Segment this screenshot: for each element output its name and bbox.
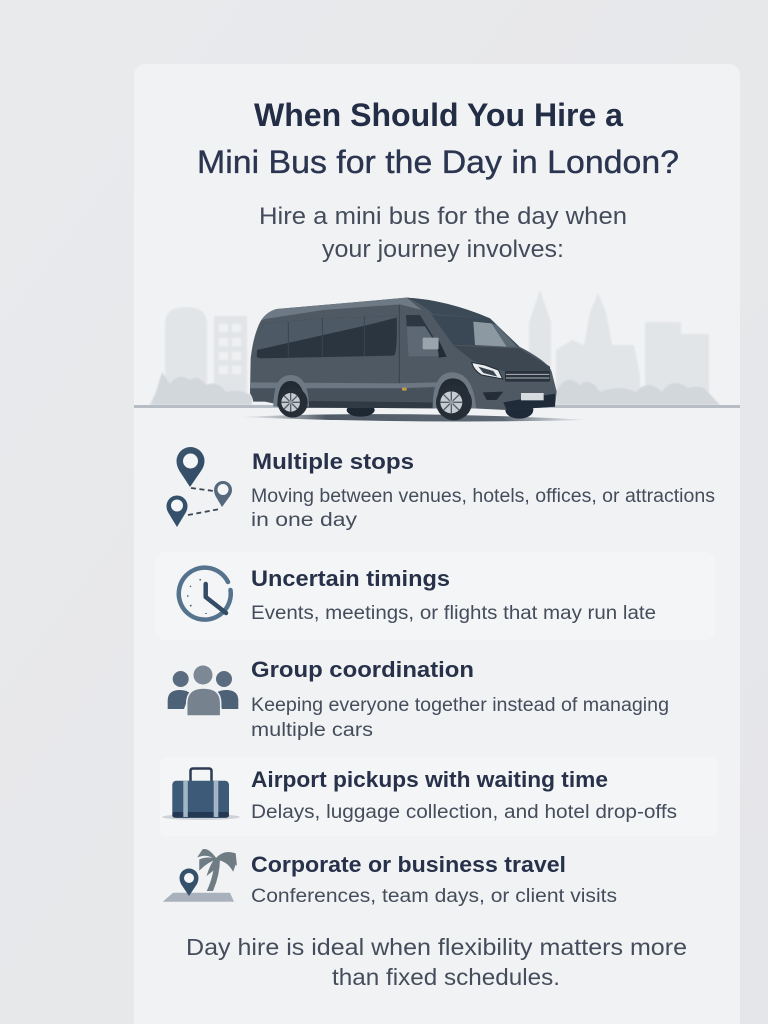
closing statement: Day hire is ideal when flexibility matters more — [186, 934, 687, 960]
heading: Corporate or business travel — [251, 852, 566, 877]
title — [197, 97, 679, 180]
description: Delays, luggage collection, and hotel drop-offs — [251, 802, 677, 823]
description: Keeping everyone together instead of managing — [251, 695, 669, 716]
ground line — [134, 405, 740, 408]
illustration: mini bus — [237, 298, 592, 421]
item: multiple stops — [166, 447, 715, 531]
heading: Multiple stops — [252, 449, 414, 474]
panel: main card — [134, 64, 740, 1024]
icon: map pins — [166, 447, 232, 527]
heading: Group coordination — [251, 657, 474, 682]
icon: pin and palm tree — [163, 850, 236, 902]
subtitle: Hire a mini bus for the day when — [259, 203, 627, 230]
subtitle: your journey involves: — [322, 236, 564, 263]
item: uncertain timings — [179, 566, 656, 624]
description — [251, 695, 669, 741]
item: airport pickups — [162, 767, 677, 823]
illustration: London skyline — [150, 290, 720, 405]
closing statement — [186, 934, 687, 990]
icon: group of people — [168, 666, 238, 716]
description — [251, 486, 715, 531]
subtitle — [259, 203, 627, 263]
title: When Should You Hire a — [254, 97, 623, 133]
title: Mini Bus for the Day in London? — [197, 144, 679, 180]
closing statement: than fixed schedules. — [332, 964, 560, 990]
description: Conferences, team days, or client visits — [251, 886, 617, 907]
description: multiple cars — [251, 720, 373, 741]
description: Moving between venues, hotels, offices, or attractions — [251, 486, 715, 507]
icon: clock — [179, 568, 231, 620]
item: corporate travel — [163, 850, 617, 907]
panel: airport pickups highlight — [160, 757, 718, 836]
description: Events, meetings, or flights that may run late — [251, 603, 656, 624]
heading: Airport pickups with waiting time — [251, 767, 608, 792]
item: group coordination — [168, 657, 669, 741]
description: in one day — [251, 510, 358, 531]
panel: uncertain timings highlight — [155, 552, 715, 640]
heading: Uncertain timings — [251, 566, 450, 591]
icon: suitcase — [162, 768, 240, 820]
